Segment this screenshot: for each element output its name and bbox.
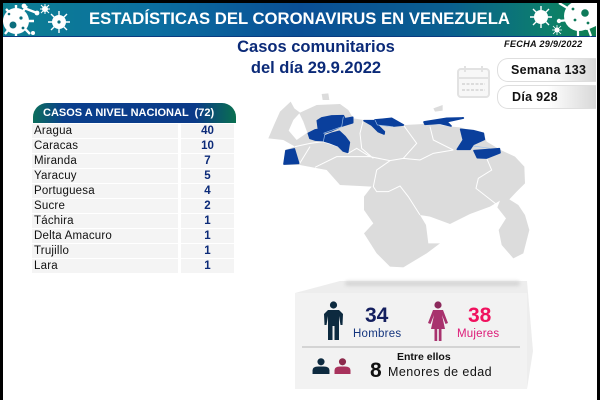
subtitle: Casos comunitarios bbox=[237, 38, 395, 56]
icon: woman bbox=[428, 301, 448, 341]
panel shadow bar bbox=[345, 281, 520, 286]
icon: virus cluster left bbox=[3, 4, 70, 36]
icon: man bbox=[324, 301, 343, 340]
table rows: 1 bbox=[204, 260, 211, 272]
day badge bbox=[497, 85, 596, 109]
image frame top bbox=[0, 0, 600, 3]
table rows: Lara bbox=[34, 260, 58, 272]
table rows: 1 bbox=[204, 215, 211, 227]
table rows bbox=[32, 124, 234, 273]
icon: child female bbox=[334, 358, 350, 374]
table rows: 10 bbox=[201, 140, 214, 152]
table rows: 7 bbox=[204, 155, 211, 167]
women count: 38 bbox=[468, 304, 491, 327]
week text: Semana 133 bbox=[511, 63, 586, 77]
icon: calendar bbox=[457, 66, 490, 98]
subtitle bbox=[237, 38, 395, 77]
icon: virus cluster right bbox=[530, 3, 596, 36]
day text: Día 928 bbox=[512, 90, 558, 104]
map: highlighted states bbox=[284, 116, 500, 164]
map: country base bbox=[268, 93, 529, 267]
table rows: 4 bbox=[204, 185, 211, 197]
men label: Hombres bbox=[353, 328, 401, 340]
table rows: Sucre bbox=[34, 200, 65, 212]
table header bbox=[33, 103, 236, 123]
table rows: Táchira bbox=[34, 215, 74, 227]
map of Venezuela bbox=[268, 94, 530, 268]
header banner bbox=[3, 3, 596, 37]
minors intro text: Entre ellos bbox=[397, 351, 451, 363]
panel: national cases table bbox=[32, 103, 236, 273]
subtitle: del día 29.9.2022 bbox=[251, 59, 381, 77]
date label: FECHA 29/9/2022 bbox=[504, 39, 582, 49]
panel body bbox=[295, 293, 527, 389]
table rows: Caracas bbox=[34, 140, 78, 152]
header title: ESTADÍSTICAS DEL CORONAVIRUS EN VENEZUELA bbox=[89, 9, 510, 28]
table rows: Aragua bbox=[34, 125, 72, 137]
table rows: 2 bbox=[204, 200, 211, 212]
panel: demographics bbox=[295, 280, 533, 389]
table rows: Yaracuy bbox=[34, 170, 77, 182]
table rows: 1 bbox=[204, 245, 211, 257]
table rows: 5 bbox=[204, 170, 211, 182]
table rows: Miranda bbox=[34, 155, 77, 167]
table rows: Delta Amacuro bbox=[34, 230, 112, 242]
icon: child male bbox=[312, 358, 330, 374]
divider bbox=[302, 346, 520, 348]
image frame left bbox=[0, 0, 3, 400]
minors count: 8 bbox=[370, 359, 382, 382]
week badge bbox=[497, 58, 596, 82]
table rows: Trujillo bbox=[34, 245, 69, 257]
image frame right bbox=[597, 0, 600, 400]
table header text: CASOS A NIVEL NACIONAL (72) bbox=[43, 107, 214, 119]
map: lake and state borders bbox=[289, 113, 307, 140]
table rows: 1 bbox=[204, 230, 211, 242]
table rows: Portuguesa bbox=[34, 185, 95, 197]
minors label: Menores de edad bbox=[388, 365, 492, 379]
panel top fold bbox=[295, 281, 533, 389]
men count: 34 bbox=[365, 304, 388, 327]
women label: Mujeres bbox=[457, 328, 499, 340]
table rows: 40 bbox=[201, 125, 214, 137]
